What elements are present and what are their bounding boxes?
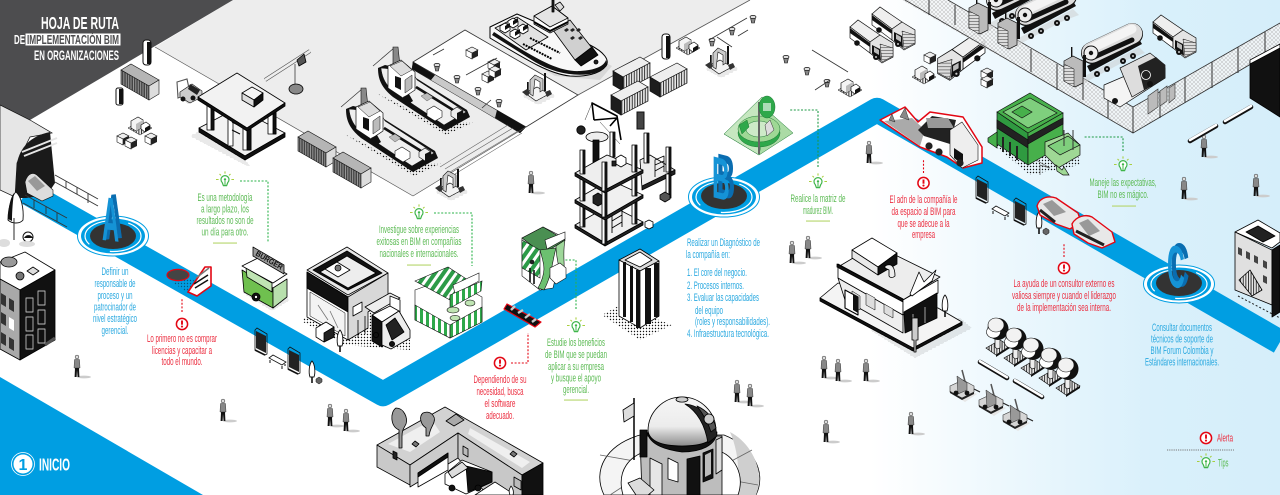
tower building [602, 249, 672, 340]
title text: IMPLEMENTACIÓN BIM [27, 32, 119, 47]
ship upper [373, 47, 474, 135]
alert text 2: el software [484, 398, 516, 410]
step B text: 4. Infraestructura tecnológica. [687, 328, 769, 340]
tip icon 4 [809, 173, 827, 188]
street furniture left [255, 328, 322, 384]
tip: madurez dashed arrow [789, 110, 818, 167]
marker A: A [102, 185, 119, 256]
forklift [177, 79, 202, 104]
alert text 2 [474, 374, 526, 422]
legend: Tips [1218, 458, 1229, 470]
alert icon 4 [1058, 262, 1070, 274]
alert icon 2 [494, 357, 506, 369]
tip icon [216, 171, 234, 186]
tip: expectativas dashed arrow [1083, 137, 1123, 151]
step A text: proceso y un [98, 290, 132, 302]
tip: experiencias dashed arrow [434, 213, 472, 266]
observatory [600, 397, 760, 495]
alert text 3: da espacio al BIM para [892, 206, 956, 218]
step B text: 2. Procesos internos. [687, 280, 744, 292]
step B text: del equipo [695, 305, 723, 317]
burger food truck: BURGER [254, 249, 285, 272]
step A text: nivel estratégico [93, 313, 137, 325]
tip text: madurez: Realice la matriz de [790, 193, 846, 205]
step A text: gerencial. [102, 325, 128, 337]
pipes and machines lower [949, 361, 1042, 431]
alert text 4: valiosa siempre y cuando el liderazgo [1012, 290, 1116, 302]
alert text 3: El adn de la compañía le [890, 194, 958, 206]
alert text 1: todo el mundo. [162, 356, 202, 368]
legend: Alerta [1217, 432, 1233, 444]
step B text: Realizar un Diagnóstico de [687, 237, 760, 249]
step A text [93, 266, 137, 337]
green building [988, 93, 1080, 175]
striped market stand [415, 267, 482, 338]
corner start tab: INICIO [39, 454, 70, 474]
tip text: beneficios [545, 337, 607, 401]
tip icon 3 [567, 317, 585, 332]
step B text [686, 237, 770, 340]
title text: EN ORGANIZACIONES [34, 48, 119, 63]
step C text: Estándares internacionales. [1145, 356, 1219, 368]
tip: beneficios dashed arrow [565, 260, 576, 309]
red outlined cars [1037, 197, 1115, 248]
alert text 2: Dependiendo de su [474, 374, 526, 386]
step B text: 3. Evaluar las capacidades [687, 292, 759, 304]
ship lower [341, 88, 442, 176]
sea area [155, 0, 750, 196]
people [74, 135, 1270, 443]
alert text 1: Lo primero no es comprar [147, 333, 217, 345]
scaffold building [575, 103, 675, 246]
tip text: expectativas [1090, 177, 1156, 207]
corner start tab: 1 [19, 457, 28, 474]
tip text: beneficios: de BIM que se puedan [545, 349, 607, 361]
tip text: beneficios: gerencial. [563, 384, 589, 396]
tip text: experiencias [376, 224, 462, 266]
tip A: metodología dashed arrow [240, 181, 268, 243]
pipes north east [1190, 106, 1251, 141]
burger food truck [242, 247, 290, 311]
alert text 4 [1012, 278, 1116, 314]
pavilion building with crane [190, 51, 310, 166]
step A text: responsable de [94, 278, 136, 290]
speed bump [504, 304, 541, 327]
trucks and pallets north [850, 7, 993, 88]
step C text: BIM Forum Colombia y [1150, 345, 1214, 357]
big ship [490, 0, 612, 80]
alert text 3 [890, 194, 958, 241]
tip text: beneficios: y busque el apoyo [551, 372, 601, 384]
store building with sign [820, 238, 972, 358]
left building [0, 252, 55, 360]
title banner [0, 0, 233, 120]
corner start tab [0, 377, 203, 495]
alert text 4: La ayuda de un consultor externo es [1014, 278, 1115, 290]
alert text 2: necesidad, busca [476, 386, 524, 398]
marker C: C [1171, 230, 1189, 300]
alert text 1 [147, 333, 217, 368]
black warehouse at right edge [1250, 44, 1280, 117]
shop with delivery van [303, 247, 410, 352]
step C text: Consultar documentos [1152, 322, 1212, 334]
tip text: madurez: madurez BIM. [803, 205, 833, 217]
tip text: experiencias: Investigue sobre experiencias [379, 224, 459, 236]
alert 2 dashed arrow [511, 333, 528, 363]
step A text: patrocinador de [94, 302, 136, 314]
title text: DE [14, 32, 25, 47]
containers near port [611, 34, 862, 129]
tip text: expectativas: BIM no es mágico. [1098, 189, 1148, 201]
marker A [78, 182, 148, 256]
tip text: metodología: a largo plazo, los [201, 204, 249, 216]
street furniture right [976, 176, 1049, 235]
step B text: (roles y responsabilidades). [695, 316, 770, 328]
tip text: metodología [196, 192, 254, 244]
tip text: metodología: Es una metodología [198, 192, 253, 204]
step C text [1145, 322, 1219, 368]
dump truck red outlined [880, 107, 982, 168]
manhole and barrier [167, 267, 211, 296]
alert text 1: licencias y capacitar a [152, 345, 212, 357]
step A text: Definir un [102, 266, 128, 278]
pier platform [412, 0, 848, 196]
tip text: expectativas: Maneje las expectativas, [1090, 177, 1156, 189]
marker B [688, 142, 760, 217]
alert icon 1 [176, 318, 188, 330]
step C text: técnicos de soporte de [1151, 334, 1213, 346]
marker C: C [1167, 232, 1185, 302]
alert text 3: empresa [912, 229, 935, 241]
tanker yard and fence [902, 0, 1280, 133]
storage area containers and pallets [116, 40, 159, 149]
marker A: A [105, 182, 122, 254]
blue road route [26, 110, 1280, 394]
title text [14, 13, 120, 63]
marker B: B [717, 142, 735, 212]
person by scaffold [528, 171, 545, 194]
tip text: metodología: resultados no son de [196, 215, 254, 227]
tip text: experiencias: exitosas en BIM en compañías [376, 236, 462, 248]
step B text: 1. El core del negocio. [687, 267, 747, 279]
tip text: experiencias: nacionales e internacionales. [380, 248, 458, 260]
green tent stand [522, 227, 566, 290]
legend [1167, 432, 1234, 470]
alert text 4: de la implementación sea interna. [1017, 302, 1111, 314]
corner building right [1235, 220, 1280, 318]
tip icon 2 [410, 204, 428, 219]
step B text: la compañía en: [686, 249, 730, 261]
alert 1 dashed arrow [181, 299, 183, 312]
green maturity plate [724, 96, 793, 155]
marker B: B [712, 144, 730, 214]
tip icon 5 [1114, 156, 1132, 171]
tip text: madurez [790, 193, 846, 222]
alert text 3: que se adecue a la [898, 218, 950, 230]
marker C [1144, 230, 1214, 303]
alert icon 3 [918, 177, 929, 189]
plaza trees [986, 318, 1080, 397]
tunnel building with car [0, 105, 98, 247]
alert text 2: adecuado. [486, 410, 514, 422]
crane machines [435, 46, 739, 201]
tip text: beneficios: aplicar a su empresa [548, 361, 604, 373]
alert 3 dashed arrow [922, 160, 924, 173]
courtyard building bottom [377, 407, 543, 495]
dock containers [298, 131, 371, 188]
tip text: metodología: un día para otro. [202, 226, 248, 238]
alert 4 dashed arrow [1063, 244, 1065, 257]
tip text: beneficios: Estudie los beneficios [547, 337, 605, 349]
title text: HOJA DE RUTA [41, 13, 119, 33]
